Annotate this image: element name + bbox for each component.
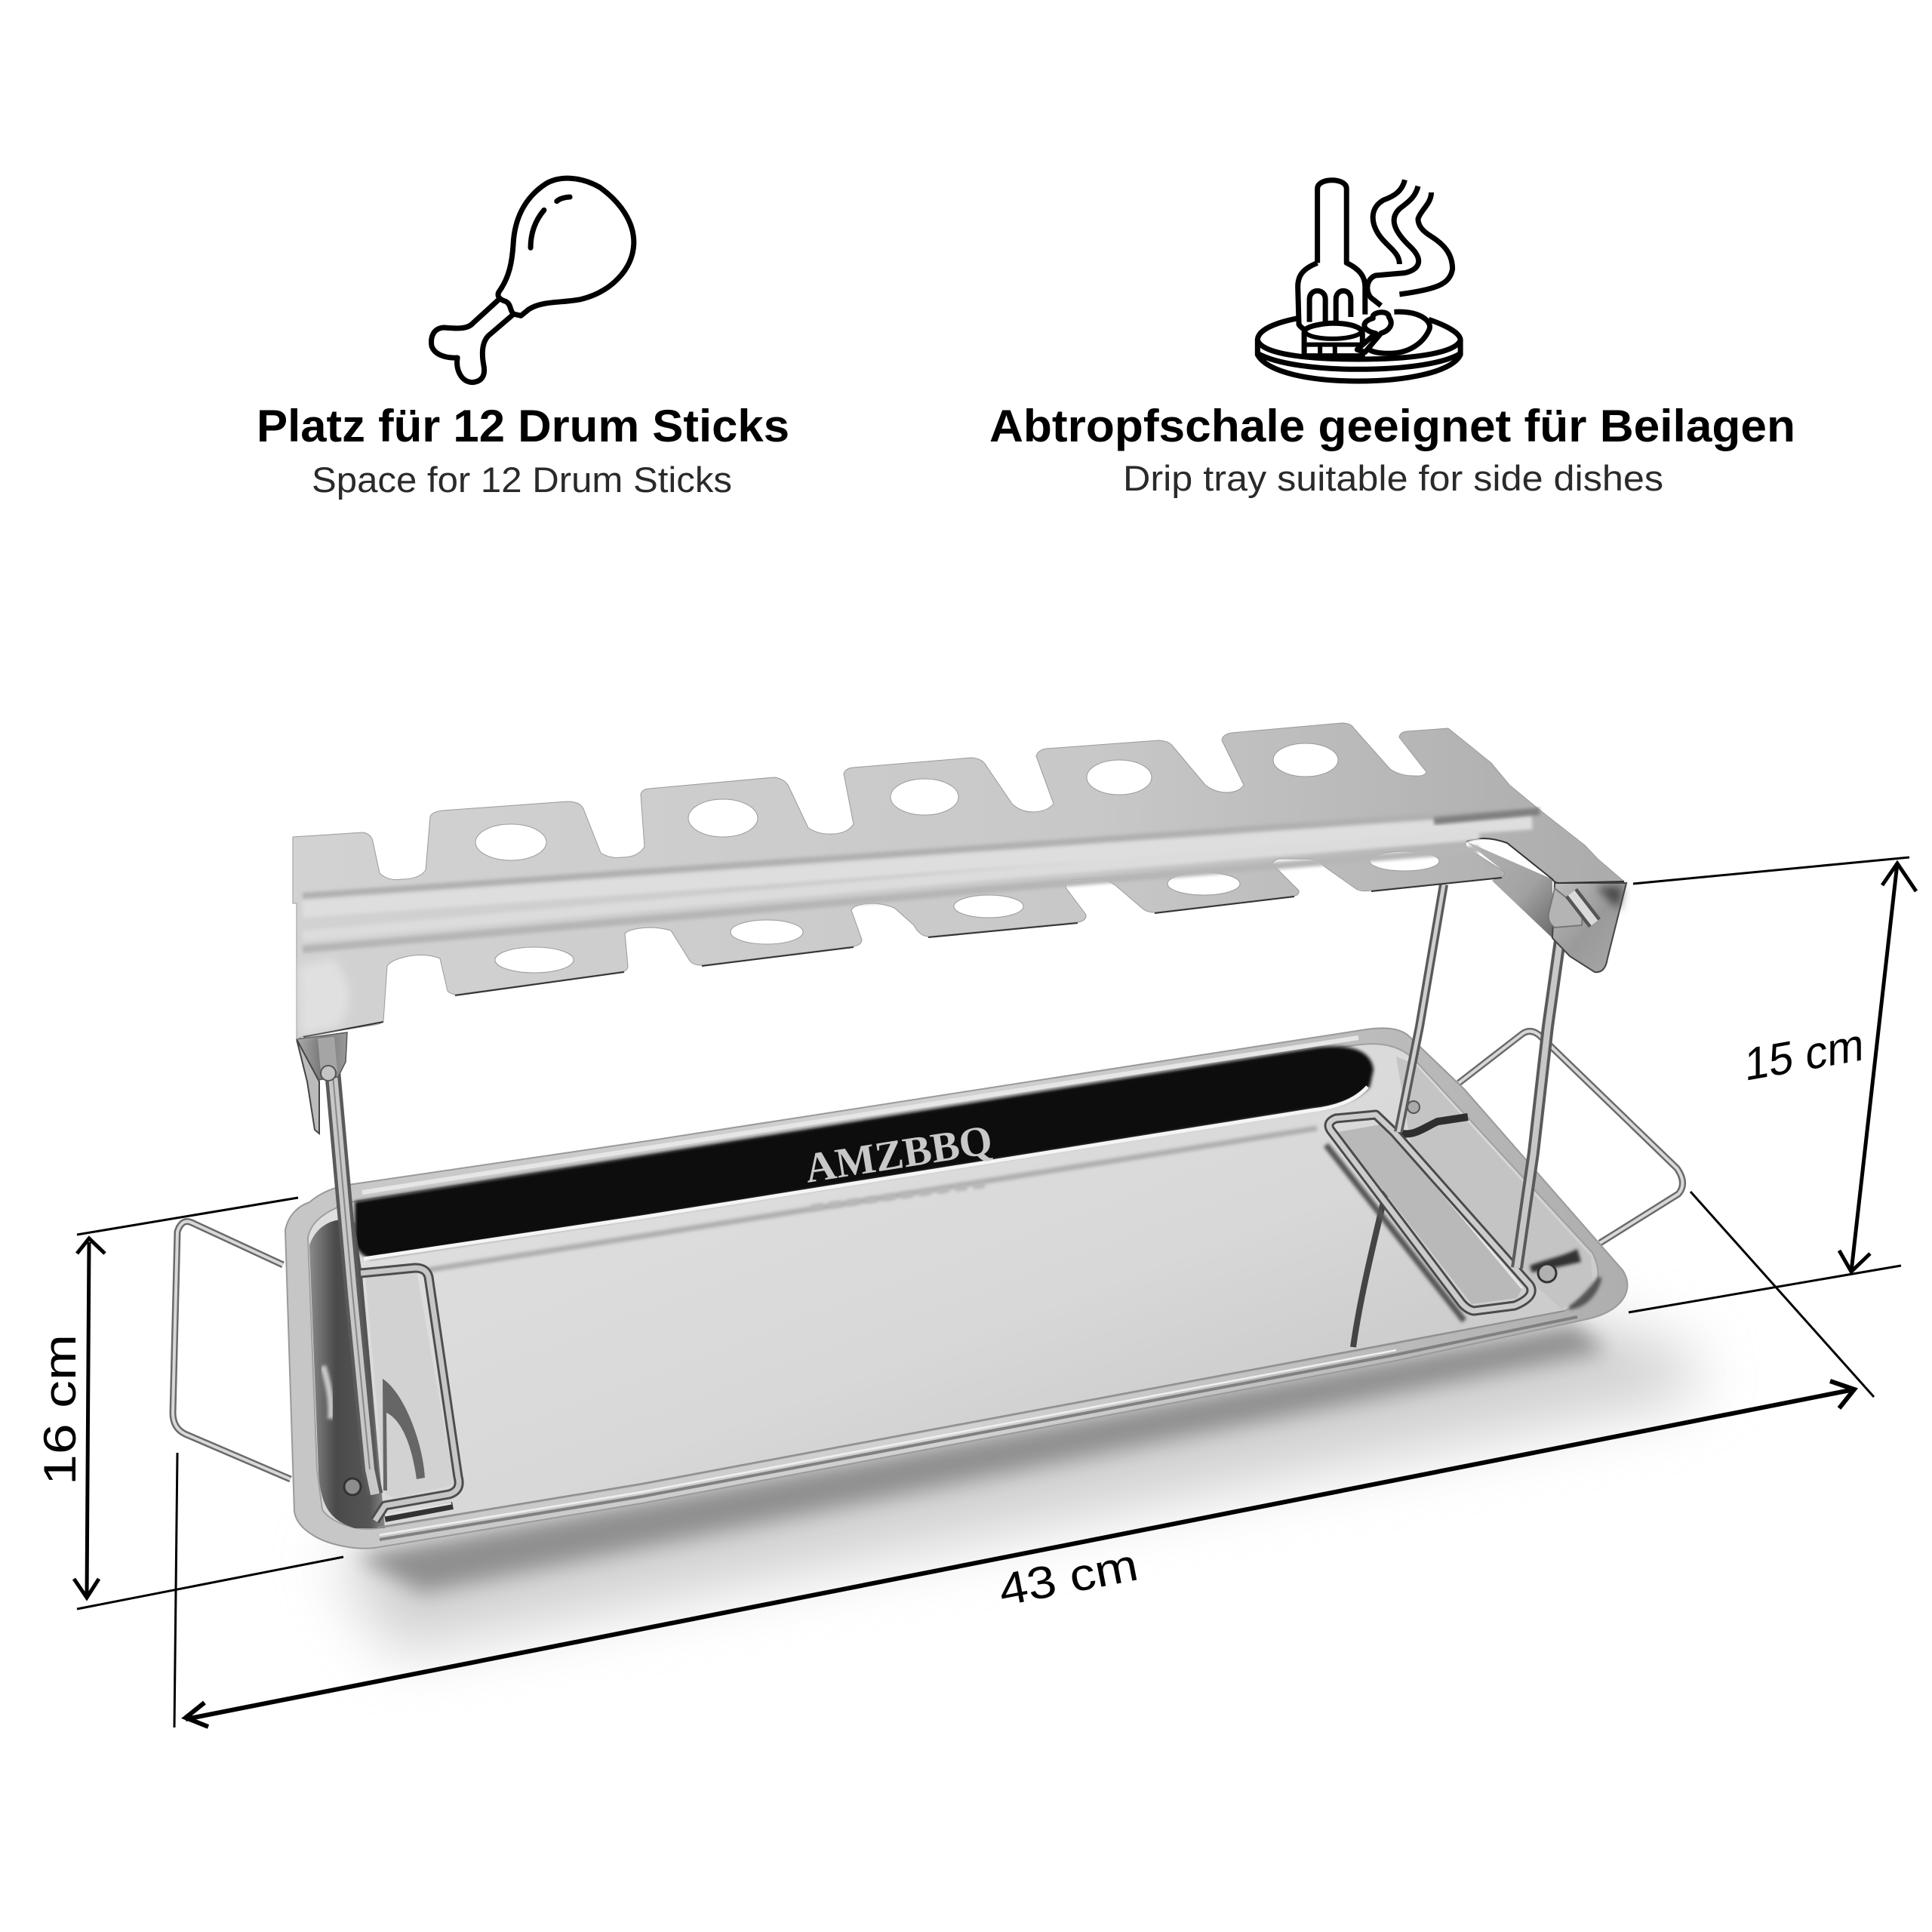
- plate reflection of rod: [1353, 1147, 1396, 1347]
- tray front rim bright line: [380, 1350, 1396, 1535]
- right bracket inner side wall: [1466, 841, 1552, 938]
- rack: [293, 723, 1626, 1134]
- right foot frame: [1326, 1115, 1531, 1321]
- left bracket box: [297, 1032, 347, 1081]
- heading: Platz für 12 Drum Sticks: Platz für 12 Drum Sticks: [257, 401, 789, 451]
- dimension: height 15 cm: [1629, 857, 1916, 1312]
- heading: Abtropfschale geeignet für Beilagen: Abtropfschale geeignet für Beilagen: [989, 401, 1795, 451]
- tray right wall reflection: [1396, 1057, 1592, 1309]
- drip tray: [285, 1028, 1627, 1549]
- perforated rack sheet: [293, 723, 1624, 1039]
- right bracket dark shading: [1596, 887, 1623, 909]
- tray left wall reflection: [309, 1220, 385, 1528]
- left foot frame: [361, 1268, 459, 1521]
- tray right corner dark band: [1530, 1249, 1581, 1272]
- subheading: Drip tray suitable for side dishes: Drip tray suitable for side dishes: [1123, 458, 1663, 498]
- label 16 cm: 16 cm: [35, 1334, 85, 1485]
- dimension: depth 16 cm: [35, 1198, 343, 1609]
- label 43 cm: 43 cm: [995, 1540, 1142, 1616]
- right bracket front face: [1552, 883, 1626, 972]
- subheading: Space for 12 Drum Sticks: Space for 12 Drum Sticks: [312, 460, 732, 500]
- rack fold ribs: [303, 809, 1532, 949]
- rack lower edge dark lines: [303, 838, 1624, 1037]
- tray back wall (dark reflection): [355, 1047, 1374, 1259]
- dimension: length 43 cm: [174, 1192, 1874, 1727]
- support rod front right: [1517, 924, 1562, 1268]
- tray right corner crescent reflection: [1570, 1278, 1600, 1308]
- floor shadow under tray: [332, 1317, 1698, 1653]
- tray back wall highlights: [364, 1087, 1367, 1259]
- tray right corner knob: [1538, 1264, 1556, 1282]
- right bracket pin: [1571, 893, 1595, 923]
- left rod top in bracket: [326, 1038, 329, 1072]
- tray left wall glint: [323, 1366, 331, 1419]
- left hinge pin: [321, 1066, 336, 1081]
- tray front rim lines: [380, 1317, 1577, 1540]
- rack left fold shading: [299, 958, 349, 1035]
- right bracket hinge plate: [1549, 888, 1583, 928]
- support rod back right: [1398, 884, 1444, 1132]
- tray inner front line: [377, 1311, 1564, 1527]
- brand engraving AMZBBQ: AMZBBQ: [801, 1116, 995, 1192]
- rack right fold dark streak: [1434, 811, 1540, 821]
- icon: fork with plate and steam: [1257, 180, 1460, 381]
- support rod left: [330, 1041, 375, 1494]
- icon: chicken drumstick: [432, 178, 634, 383]
- label 15 cm: 15 cm: [1745, 1018, 1864, 1091]
- left wire handle: [173, 1221, 291, 1479]
- tray back rim highlight: [362, 1038, 1358, 1192]
- right wire handle: [1459, 1031, 1683, 1243]
- tray rim grey band: [423, 1128, 1317, 1271]
- brand reflection: [811, 1185, 985, 1208]
- tray upper right knob: [1407, 1101, 1420, 1113]
- left bracket tail: [297, 1039, 319, 1134]
- tray left corner knob: [344, 1478, 361, 1495]
